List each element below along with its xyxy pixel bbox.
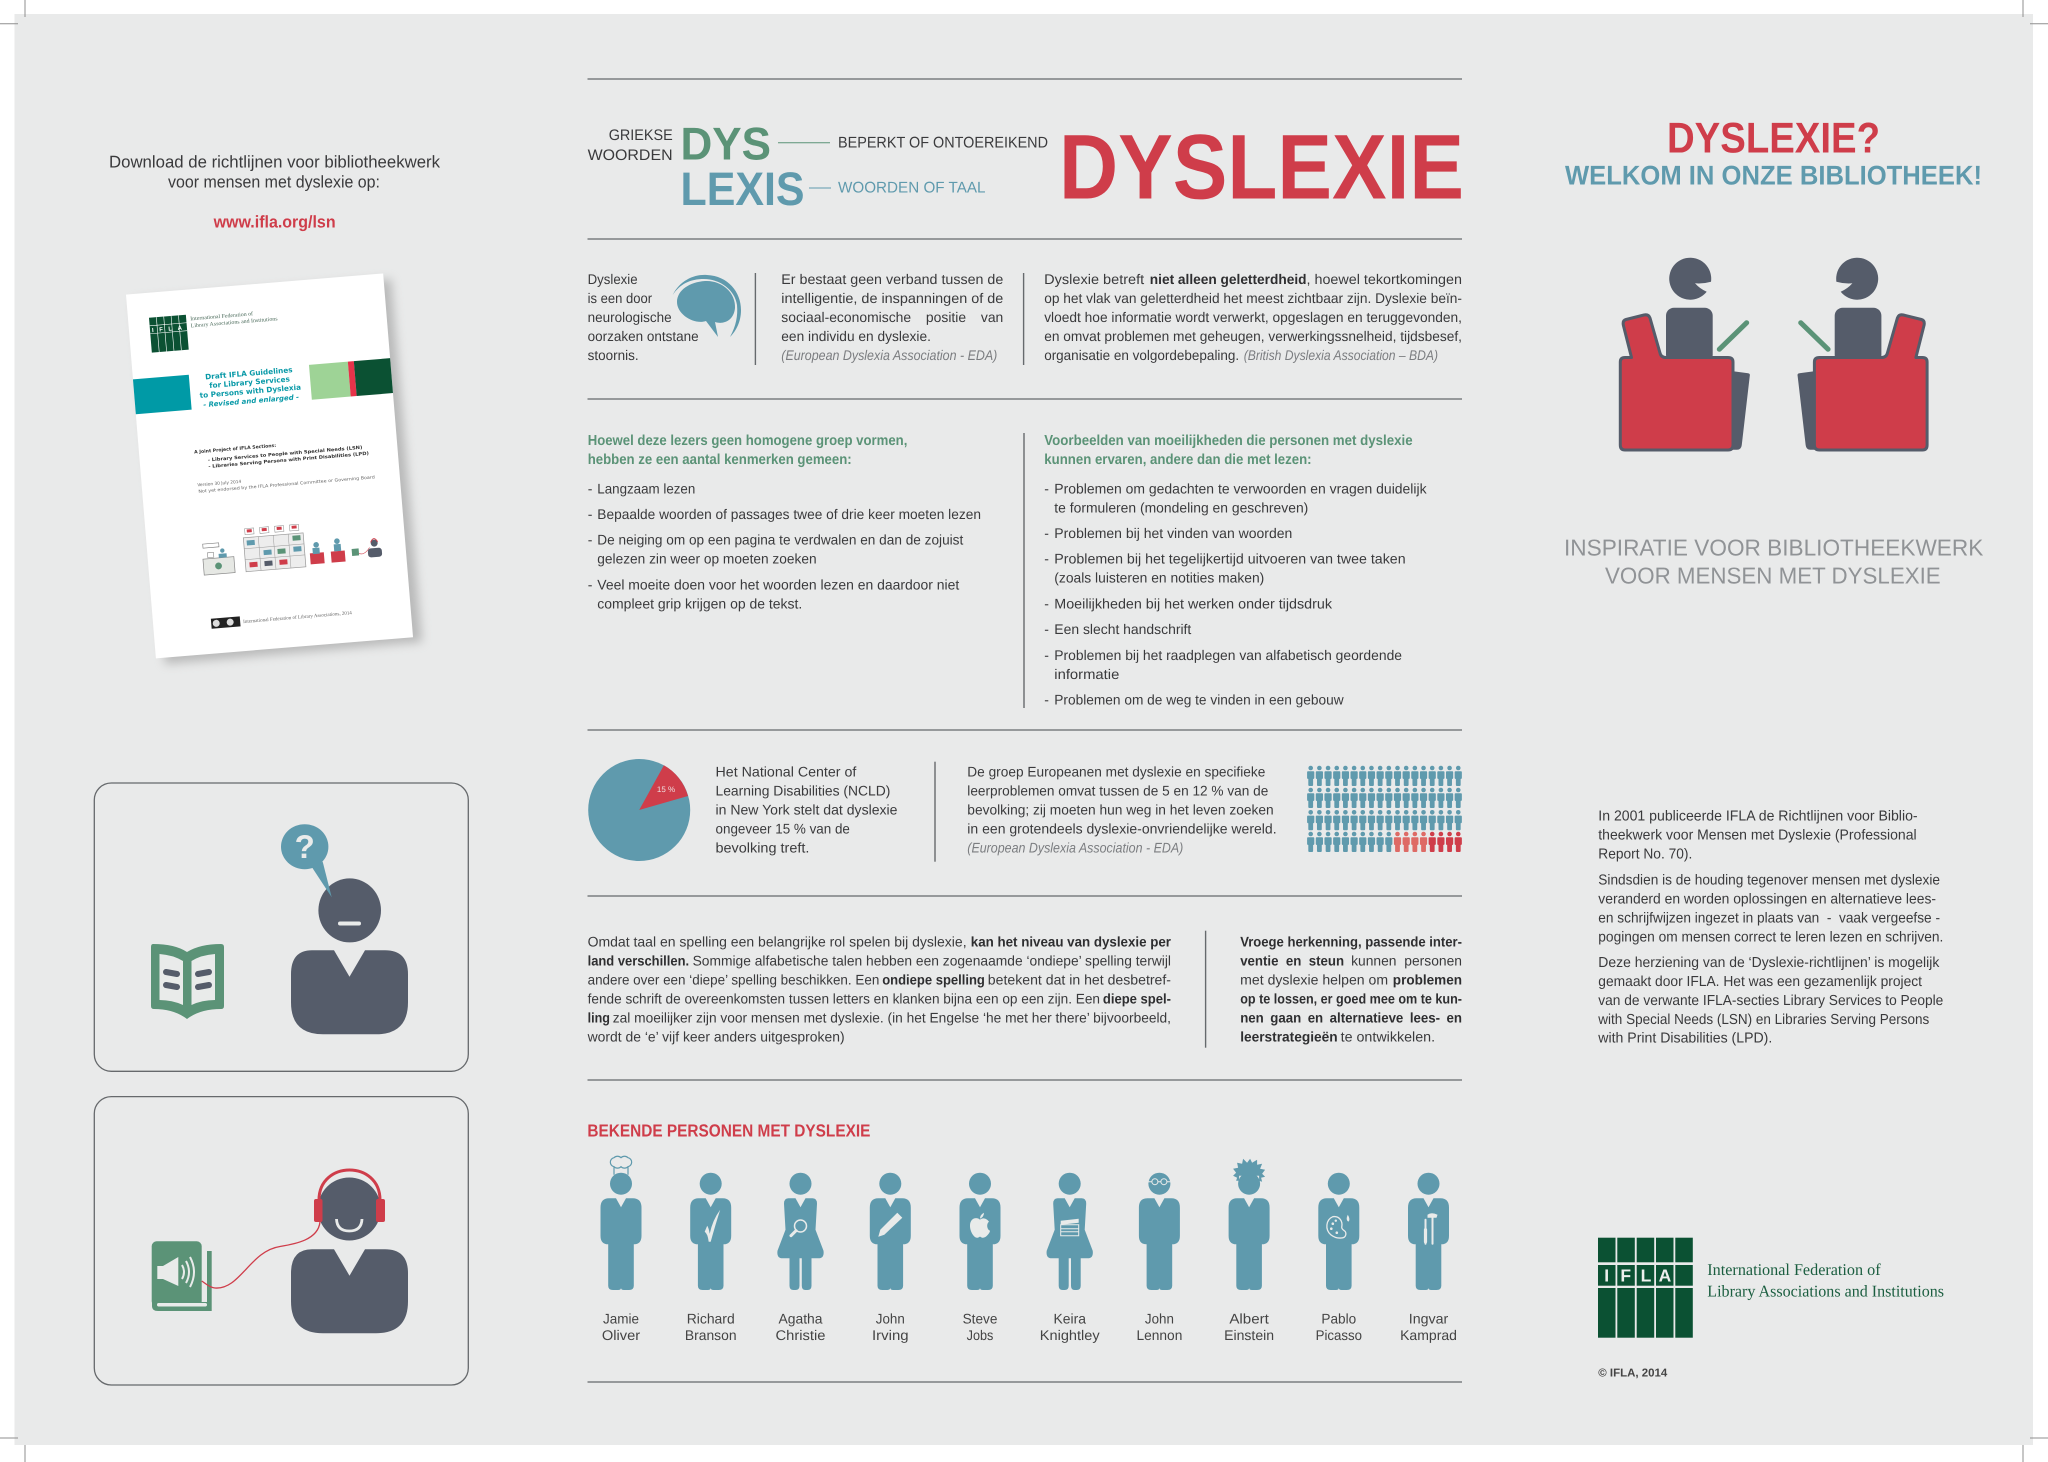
icon: speech bubble with question mark (281, 824, 332, 897)
left column: download text (109, 152, 440, 232)
title: word origin: WOORDEN OF TAAL (838, 179, 986, 196)
cover title: - Revised and enlarged - (203, 393, 299, 409)
list: Langzaam lezen (597, 480, 695, 496)
text: definition: neurologische (588, 309, 672, 325)
text: intelligence: een individu en dyslexie. (781, 328, 931, 344)
icon: speech bubble with question mark: ? (295, 828, 315, 865)
text: beyond literacy: niet alleen geletterdheid (1150, 271, 1306, 287)
download link: www.ifla.org/lsn (213, 213, 336, 232)
cover project text (194, 435, 375, 495)
person: Ingvar Kamprad (1400, 1173, 1457, 1343)
icon: brain (673, 275, 741, 337)
text: language and spelling: ling (588, 1009, 610, 1025)
text: language and spelling: zal moeilijker zijn voor mensen met dyslexie. (in het Engelse ‘he met her there’ bijvoorbeeld, (613, 1009, 1171, 1025)
list: - (1044, 480, 1049, 496)
cover project text: Not yet endorsed by the IFLA Professional Committee or Governing Board (198, 474, 375, 495)
text: language and spelling: fende schrift de overeenkomsten tussen letters en klanken bijna een op een zijn. Een (588, 990, 1100, 1006)
title: word origin: WOORDEN (588, 147, 673, 164)
text: history of the guidelines: Deze herziening van de ‘Dyslexie-richtlijnen’ is mogelijk (1598, 955, 1940, 971)
text: history of the guidelines (1597, 809, 1943, 1047)
list: Een slecht handschrift (1054, 621, 1191, 637)
text: NCLD (716, 764, 898, 856)
person: John Irving: Irving (872, 1327, 909, 1343)
text: history of the guidelines: van de verwante IFLA-secties Library Services to People (1598, 993, 1943, 1009)
title: word origin: BEPERKT OF ONTOEREIKEND (838, 135, 1048, 152)
text: language and spelling (587, 934, 1172, 1044)
text: beyond literacy: (British Dyslexia Association – BDA) (1244, 347, 1438, 363)
list: Bepaalde woorden of passages twee of drie keer moeten lezen (597, 506, 981, 522)
person: John Irving: John (876, 1310, 905, 1326)
list: Veel moeite doen voor het woorden lezen en daardoor niet (597, 576, 959, 592)
text: Europeans: leerproblemen omvat tussen de 5 en 12 % van de (967, 783, 1268, 799)
list: Problemen bij het vinden van woorden (1054, 525, 1292, 541)
text: intelligence: (European Dyslexia Association - EDA) (781, 347, 997, 363)
person: John Irving (870, 1173, 911, 1343)
person: Pablo Picasso: Pablo (1321, 1310, 1356, 1326)
subtitle: inspiration (1564, 534, 1984, 589)
person: Richard Branson: Branson (685, 1327, 737, 1343)
text: early recognition: op te lossen, er goed mee om te kun- (1240, 990, 1462, 1006)
definition block (588, 271, 1462, 365)
text: intelligence (781, 271, 1004, 363)
cover title: for Library Services (209, 374, 290, 390)
list: gelezen zin weer op moeten zoeken (597, 550, 817, 566)
text: intelligence: sociaal-economische positie van (781, 309, 1003, 325)
list (588, 480, 981, 611)
text: definition: Dyslexie (588, 271, 638, 287)
heading: famous people: BEKENDE PERSONEN MET DYSLEXIE (587, 1121, 870, 1141)
mini IFLA logo (149, 307, 279, 353)
text: history of the guidelines: Sindsdien is de houding tegenover mensen met dyslexie (1598, 872, 1940, 888)
IFLA name: Library Associations and Institutions (1707, 1282, 1944, 1301)
person: Keira Knightley (1040, 1173, 1100, 1343)
cover title: to Persons with Dyslexia (199, 383, 301, 400)
text: language and spelling: betekent dat in het desbetref- (988, 971, 1171, 987)
list: - (1044, 550, 1049, 566)
person: Richard Branson: Richard (687, 1310, 735, 1326)
title: word origin: DYS (680, 117, 771, 169)
heading: kunnen ervaren, andere dan die met lezen: (1044, 452, 1312, 468)
list: - (588, 576, 593, 592)
cover colour bars (133, 358, 393, 414)
text: beyond literacy: vloedt hoe informatie wordt verwerkt, opgeslagen en teruggevonden, (1044, 309, 1462, 325)
person: Agatha Christie: Agatha (778, 1310, 823, 1326)
left column: download text: Download de richtlijnen voor bibliotheekwerk (109, 152, 440, 171)
IFLA logo: L (1641, 1266, 1652, 1286)
person: Albert Einstein (1224, 1159, 1274, 1343)
text: beyond literacy: , hoewel tekortkomingen (1306, 271, 1462, 287)
text: NCLD: ongeveer 15 % van de (716, 821, 850, 837)
text: history of the guidelines: with Special Needs (LSN) en Libraries Serving Persons (1597, 1012, 1929, 1028)
text: NCLD: in New York stelt dat dyslexie (716, 802, 898, 818)
text: Europeans (967, 764, 1277, 856)
person: Albert Einstein: Albert (1229, 1310, 1269, 1326)
text: NCLD: Learning Disabilities (NCLD) (716, 783, 890, 799)
copyright: © IFLA, 2014 (1598, 1368, 1668, 1380)
heading: Voorbeelden van moeilijkheden die personen met dyslexie (1044, 433, 1413, 449)
right column heading: WELKOM IN ONZE BIBLIOTHEEK! (1565, 160, 1982, 190)
mini IFLA logo: International Federation of (190, 311, 253, 322)
text: early recognition: te ontwikkelen. (1341, 1028, 1435, 1044)
person: Albert Einstein: Einstein (1224, 1327, 1274, 1343)
icon: two people in chairs in conversation (1620, 258, 1927, 450)
text: early recognition: met dyslexie helpen om (1240, 971, 1388, 987)
cover creative commons badge and credit: International Federation of Library Associations, 2014 (243, 610, 353, 625)
text: early recognition: ventie en steun (1240, 953, 1344, 969)
text: Europeans: De groep Europeanen met dyslexie en specifieke (967, 764, 1266, 780)
text: history of the guidelines: pogingen om mensen correct te leren lezen en schrijven. (1598, 930, 1943, 946)
IFLA logo: A (1659, 1266, 1672, 1286)
person: Pablo Picasso: Picasso (1316, 1327, 1362, 1343)
title: DYSLEXIE: DYSLEXIE (1059, 116, 1464, 218)
list: (zoals luisteren en notities maken) (1054, 569, 1264, 585)
IFLA logo (1598, 1238, 1944, 1338)
text: Europeans: in een grotendeels dyslexie-onvriendelijke wereld. (967, 821, 1277, 837)
text: definition: oorzaken ontstane (588, 328, 699, 344)
list: - (1044, 691, 1049, 707)
person: Ingvar Kamprad: Ingvar (1409, 1310, 1449, 1326)
person: Agatha Christie (776, 1173, 826, 1343)
text: history of the guidelines: Report No. 70). (1598, 846, 1692, 862)
cover mini icons (201, 518, 383, 575)
list: - (588, 480, 593, 496)
panel: reader with audio book (94, 1097, 468, 1385)
text: history of the guidelines: theekwerk voor Mensen met Dyslexie (Professional (1598, 828, 1917, 844)
list: informatie (1054, 666, 1120, 682)
subtitle: inspiration: VOOR MENSEN MET DYSLEXIE (1605, 563, 1941, 589)
text: NCLD: bevolking treft. (716, 840, 809, 856)
list (1044, 480, 1428, 707)
person: Jamie Oliver (600, 1156, 642, 1343)
cover title: Draft IFLA Guidelines (205, 365, 293, 381)
text: early recognition: leerstrategieën (1240, 1028, 1338, 1044)
IFLA logo: F (1620, 1266, 1631, 1286)
cover project text: - Libraries Serving Persons with Print Disabilities (LPD) (208, 451, 369, 470)
cover project text: - Library Services to People with Special Needs (LSN) (208, 445, 363, 463)
text: beyond literacy: op het vlak van geletterdheid het meest zichtbaar zijn. Dyslexie beïn- (1044, 290, 1462, 306)
guidelines document cover (126, 273, 422, 664)
person: Jamie Oliver: Oliver (602, 1327, 640, 1343)
list: Problemen om gedachten te verwoorden en vragen duidelijk (1054, 480, 1428, 496)
text: language and spelling: land verschillen. (588, 953, 689, 969)
text: language and spelling: diepe spel- (1103, 990, 1171, 1006)
pie chart: 15 percent (588, 759, 690, 861)
person in chair left (1620, 258, 1749, 450)
text: beyond literacy: en omvat problemen met geheugen, verwerkingssnelheid, tijdsbesef, (1044, 328, 1462, 344)
text: language and spelling: andere over een ‘diepe’ spelling beschikken. Een (588, 971, 879, 987)
text: beyond literacy (1044, 271, 1462, 363)
panel: shared characteristics (588, 433, 981, 611)
cover project text: A Joint Project of IFLA Sections: (194, 443, 277, 456)
IFLA name: International Federation of (1707, 1260, 1881, 1279)
text: Europeans: (European Dyslexia Association - EDA) (967, 840, 1183, 856)
mini IFLA logo: IFLA (152, 325, 183, 334)
heading: hebben ze een aantal kenmerken gemeen: (588, 452, 852, 468)
text: early recognition: kunnen personen (1351, 953, 1462, 969)
text: history of the guidelines: gemaakt door IFLA. Het was een gezamenlijk project (1598, 974, 1922, 990)
text: history of the guidelines: with Print Disabilities (LPD). (1597, 1031, 1772, 1047)
mini IFLA logo: Library Associations and Institutions (191, 316, 278, 329)
text: history of the guidelines: veranderd en worden oplossingen en alternatieve lees- (1598, 892, 1936, 908)
person: Keira Knightley: Knightley (1040, 1327, 1100, 1343)
text: intelligence: intelligentie, de inspanningen of de (781, 290, 1004, 306)
list: te formuleren (mondeling en geschreven) (1054, 499, 1308, 515)
IFLA logo: I (1604, 1266, 1609, 1286)
title: word origin: LEXIS (680, 162, 804, 215)
person: Steve Jobs: Jobs (967, 1327, 993, 1343)
pictogram chart: people (1307, 766, 1462, 852)
person: Agatha Christie: Christie (776, 1327, 826, 1343)
text: intelligence: Er bestaat geen verband tussen de (781, 271, 1004, 287)
text: Europeans: bevolking; zij moeten hun weg in het leven zoeken (967, 802, 1274, 818)
text: language and spelling: Omdat taal en spelling een belangrijke rol spelen bij dyslexie, (588, 934, 967, 950)
list: - (588, 531, 593, 547)
pie chart: 15 percent: 15 % (657, 785, 675, 794)
title: word origin (588, 117, 1048, 215)
section rules (588, 79, 1462, 1382)
icon: open book (151, 944, 224, 1019)
icon: person with headphones (291, 1170, 408, 1333)
text: history of the guidelines: In 2001 publiceerde IFLA de Richtlijnen voor Biblio- (1598, 809, 1918, 825)
text: early recognition: nen gaan en alternatieve lees- en (1240, 1009, 1462, 1025)
text: language and spelling: wordt de ‘e’ vijf keer anders uitgesproken) (587, 1028, 845, 1044)
list: - (1044, 621, 1049, 637)
left column: download text: voor mensen met dyslexie op: (168, 172, 380, 192)
list: Moeilijkheden bij het werken onder tijdsdruk (1054, 595, 1333, 611)
text: early recognition (1240, 934, 1462, 1044)
heading (1044, 433, 1413, 468)
subtitle: inspiration: INSPIRATIE VOOR BIBLIOTHEEKWERK (1564, 534, 1984, 560)
icon: audio book (152, 1241, 212, 1311)
heading (588, 433, 907, 468)
right column heading: DYSLEXIE? (1667, 114, 1880, 162)
icon: person with flat mouth (291, 878, 408, 1034)
person in chair right (1798, 258, 1927, 450)
cover creative commons badge and credit (211, 607, 353, 629)
IFLA name (1707, 1260, 1944, 1301)
list: Problemen om de weg te vinden in een gebouw (1054, 691, 1344, 707)
text: language and spelling: Sommige alfabetische talen hebben een zogenaamde ‘ondiepe’ spelling terwijl (693, 953, 1171, 969)
person: Keira Knightley: Keira (1053, 1310, 1086, 1326)
audio cable (202, 1222, 320, 1288)
panel: reader with question (94, 783, 468, 1071)
famous people row (600, 1156, 1457, 1343)
title: word origin: GRIEKSE (609, 127, 673, 144)
person: John Lennon (1136, 1173, 1182, 1343)
person: Pablo Picasso (1316, 1173, 1362, 1343)
text: beyond literacy: organisatie en volgordebepaling. (1044, 347, 1239, 363)
list: compleet grip krijgen op de tekst. (597, 595, 802, 611)
person: Ingvar Kamprad: Kamprad (1400, 1327, 1457, 1343)
heading: Hoewel deze lezers geen homogene groep vormen, (588, 433, 907, 449)
person: Jamie Oliver: Jamie (603, 1310, 639, 1326)
list: - (1044, 647, 1049, 663)
right column heading (1565, 114, 1982, 190)
text: NCLD: Het National Center of (716, 764, 856, 780)
text: language and spelling: kan het niveau van dyslexie per (971, 934, 1172, 950)
text: language and spelling: ondiepe spelling (882, 971, 985, 987)
text: early recognition: Vroege herkenning, passende inter- (1240, 934, 1462, 950)
person: Richard Branson (685, 1173, 737, 1343)
list: De neiging om op een pagina te verdwalen en dan de zojuist (597, 531, 963, 547)
text: beyond literacy: Dyslexie betreft (1044, 271, 1144, 287)
list: - (1044, 595, 1049, 611)
person: Steve Jobs (960, 1173, 1000, 1343)
list: - (1044, 525, 1049, 541)
text: history of the guidelines: en schrijfwijzen ingezet in plaats van - vaak vergeefse - (1598, 911, 1940, 927)
panel: other difficulties (1044, 433, 1428, 707)
person: Steve Jobs: Steve (963, 1310, 998, 1326)
person: John Lennon: John (1145, 1310, 1174, 1326)
cover project text: Version 30 July 2014 (197, 479, 242, 488)
text: definition (588, 271, 699, 363)
list: Problemen bij het raadplegen van alfabetisch geordende (1054, 647, 1402, 663)
person: John Lennon: Lennon (1136, 1327, 1182, 1343)
list: Problemen bij het tegelijkertijd uitvoeren van twee taken (1054, 550, 1406, 566)
text: early recognition: problemen (1393, 971, 1462, 987)
list: - (588, 506, 593, 522)
text: definition: stoornis. (588, 347, 639, 363)
cover title (198, 365, 302, 409)
text: definition: is een door (588, 290, 652, 306)
